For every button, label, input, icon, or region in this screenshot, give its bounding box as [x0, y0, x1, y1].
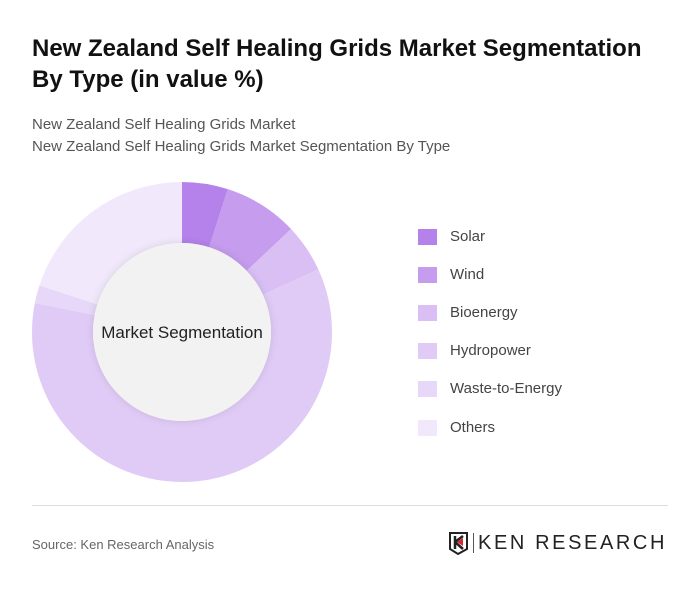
- donut chart: Market Segmentation: [101, 323, 263, 342]
- text: Others: [450, 419, 495, 436]
- text: Bioenergy: [450, 304, 518, 321]
- text: Solar: [450, 228, 485, 245]
- subtitle: [32, 116, 450, 155]
- logo: KEN RESEARCH: [478, 532, 667, 554]
- text: Waste-to-Energy: [450, 380, 562, 397]
- subtitle: New Zealand Self Healing Grids Market Segmentation By Type: [32, 138, 450, 155]
- text: Wind: [450, 266, 484, 283]
- source: Source: Ken Research Analysis: [32, 537, 214, 552]
- legend: [418, 228, 562, 436]
- subtitle: New Zealand Self Healing Grids Market: [32, 116, 295, 133]
- title: New Zealand Self Healing Grids Market Segmentation By Type (in value %): [32, 35, 641, 93]
- text: Hydropower: [450, 342, 531, 359]
